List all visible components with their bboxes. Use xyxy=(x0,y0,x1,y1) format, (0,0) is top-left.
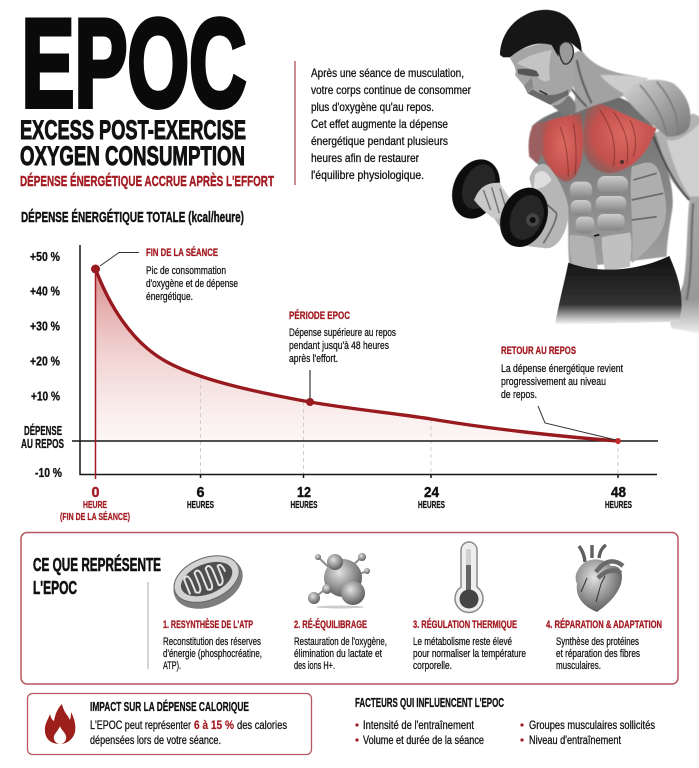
abdominal blocks xyxy=(570,182,592,198)
shorts xyxy=(555,256,682,325)
subtitle: excess post-exercise oxygen consumption xyxy=(20,115,246,171)
panel heading: CE QUE REPRÉSENTE xyxy=(33,554,161,575)
column 3: thermal regulation: Le métabolisme reste élevé xyxy=(413,636,512,648)
callout: end of session: Pic de consommation xyxy=(146,265,226,277)
subtitle: excess post-exercise oxygen consumption: OXYGEN CONSUMPTION xyxy=(20,141,245,171)
dashed hour guides xyxy=(200,378,618,474)
factors list: FACTEURS QUI INFLUENCENT L'EPOC xyxy=(355,696,504,710)
dumbbell xyxy=(443,152,509,226)
panel: what EPOC represents xyxy=(21,532,678,684)
column 2: rebalancing: Restauration de l'oxygène, xyxy=(294,636,387,648)
impact text: des calories xyxy=(237,718,287,732)
bent arm xyxy=(493,164,569,248)
x-axis labels: HEURES xyxy=(605,500,632,511)
intro text block: votre corps continue de consommer xyxy=(311,83,471,97)
callout: EPOC period: après l'effort. xyxy=(289,353,338,365)
y-axis labels: +10 % xyxy=(31,388,60,404)
x-axis labels: HEURES xyxy=(187,500,214,511)
impact text: 6 à 15 % xyxy=(194,718,234,732)
panel heading xyxy=(33,554,161,598)
y-axis labels: -10 % xyxy=(35,465,62,480)
x-axis labels: HEURES xyxy=(290,500,318,511)
subtitle: excess post-exercise oxygen consumption: EXCESS POST-EXERCISE xyxy=(20,115,246,145)
column 1: ATP resynthesis xyxy=(163,618,262,672)
curve line xyxy=(96,269,618,441)
column 1: ATP resynthesis: Reconstitution des réserves xyxy=(163,636,261,648)
callout: return to rest xyxy=(501,345,623,440)
column 2: rebalancing: 2. RÉ-ÉQUILIBRAGE xyxy=(294,618,367,631)
point: EPOC period xyxy=(306,398,314,406)
column 3: thermal regulation: 3. RÉGULATION THERMIQUE xyxy=(413,618,517,631)
y-axis labels: +30 % xyxy=(30,318,60,334)
impact text xyxy=(90,699,287,747)
intro text block: l'équilibre physiologique. xyxy=(311,168,424,182)
column 2: rebalancing: des ions H+. xyxy=(294,660,335,672)
column 3: thermal regulation xyxy=(413,618,526,672)
intro text block: plus d'oxygène qu'au repos. xyxy=(311,100,434,114)
x-axis labels: 12 xyxy=(297,484,311,501)
head xyxy=(510,42,575,105)
callout: EPOC period: PÉRIODE EPOC xyxy=(289,309,350,322)
x-axis labels: HEURE xyxy=(83,500,107,511)
icon: molecule xyxy=(308,553,370,608)
callout: end of session: FIN DE LA SÉANCE xyxy=(146,246,218,259)
shaded area under curve xyxy=(96,269,618,441)
impact text: IMPACT SUR LA DÉPENSE CALORIQUE xyxy=(90,699,249,714)
column 4: repair and adaptation: Synthèse des protéines xyxy=(556,636,639,648)
illustration: muscular man curling a dumbbell xyxy=(443,10,699,333)
point: peak xyxy=(91,264,100,274)
impact text: L'EPOC peut représenter xyxy=(90,718,191,732)
x-axis labels: HEURES xyxy=(418,500,445,511)
column 2: rebalancing: élimination du lactate et xyxy=(294,648,382,660)
x-axis labels: 6 xyxy=(196,484,204,501)
point: return to rest xyxy=(615,438,621,444)
panel heading: L'EPOC xyxy=(33,577,77,598)
factors list: Groupes musculaires sollicités xyxy=(529,718,655,732)
callout: EPOC period: Dépense supérieure au repos xyxy=(289,327,396,339)
y-axis labels xyxy=(21,249,64,480)
factors list: Volume et durée de la séance xyxy=(363,733,484,747)
x-axis labels: 0 xyxy=(92,484,100,501)
y-axis labels: +20 % xyxy=(30,354,60,368)
callout: EPOC period xyxy=(289,309,396,399)
callout: return to rest: de repos. xyxy=(501,389,537,401)
x-axis labels: 24 xyxy=(424,484,440,501)
column 3: thermal regulation: pour normaliser la température xyxy=(413,648,526,660)
column 1: ATP resynthesis: ATP). xyxy=(163,660,181,672)
red tagline: DÉPENSE ÉNERGÉTIQUE ACCRUE APRÈS L'EFFORT xyxy=(20,173,274,190)
column 3: thermal regulation: corporelle. xyxy=(413,660,452,672)
column 1: ATP resynthesis: 1. RESYNTHÈSE DE L'ATP xyxy=(163,618,253,631)
callout: return to rest: progressivement au niveau xyxy=(501,376,606,388)
column 2: rebalancing xyxy=(294,618,387,672)
callout: end of session xyxy=(100,246,238,303)
icon: anatomical heart xyxy=(576,545,623,612)
intro text block xyxy=(295,61,471,185)
intro text block: Après une séance de musculation, xyxy=(311,66,464,80)
column 4: repair and adaptation xyxy=(546,618,662,672)
impact text: dépensées lors de votre séance. xyxy=(90,733,221,747)
y-axis labels: +50 % xyxy=(30,249,60,264)
chart: energy expenditure curve xyxy=(21,245,658,523)
x-axis labels: 48 xyxy=(611,484,626,501)
y-axis labels: +40 % xyxy=(30,284,60,298)
callout: end of session: énergétique. xyxy=(146,291,193,303)
callout: return to rest: RETOUR AU REPOS xyxy=(501,345,576,357)
callout: return to rest: La dépense énergétique revient xyxy=(501,363,623,375)
panel: caloric impact xyxy=(28,694,312,754)
intro text block: énergétique pendant plusieurs xyxy=(311,134,448,148)
column 4: repair and adaptation: et réparation des fibres xyxy=(556,648,640,660)
y-axis labels: AU REPOS xyxy=(21,436,64,451)
chart heading: DÉPENSE ÉNERGÉTIQUE TOTALE (kcal/heure) xyxy=(21,209,244,226)
icon: mitochondrion xyxy=(165,546,250,619)
callout: end of session: d'oxygène et de dépense xyxy=(146,278,238,290)
icon: flame xyxy=(45,704,75,744)
pectoral shapes xyxy=(584,103,657,173)
column 1: ATP resynthesis: d'énergie (phosphocréatine, xyxy=(163,648,262,660)
x-axis labels xyxy=(60,484,632,523)
callout: EPOC period: pendant jusqu'à 48 heures xyxy=(289,340,389,352)
intro text block: heures afin de restaurer xyxy=(311,151,419,165)
icon: thermometer xyxy=(455,542,483,612)
intro text block: Cet effet augmente la dépense xyxy=(311,117,448,131)
axes xyxy=(72,245,658,478)
factors list: Intensité de l'entraînement xyxy=(363,718,475,732)
x-axis labels: (FIN DE LA SÉANCE) xyxy=(60,510,130,523)
column 4: repair and adaptation: musculaires. xyxy=(556,660,601,672)
y-axis labels: DÉPENSE xyxy=(24,423,62,438)
factors list: Niveau d'entraînement xyxy=(529,733,622,747)
factors list xyxy=(355,696,655,747)
